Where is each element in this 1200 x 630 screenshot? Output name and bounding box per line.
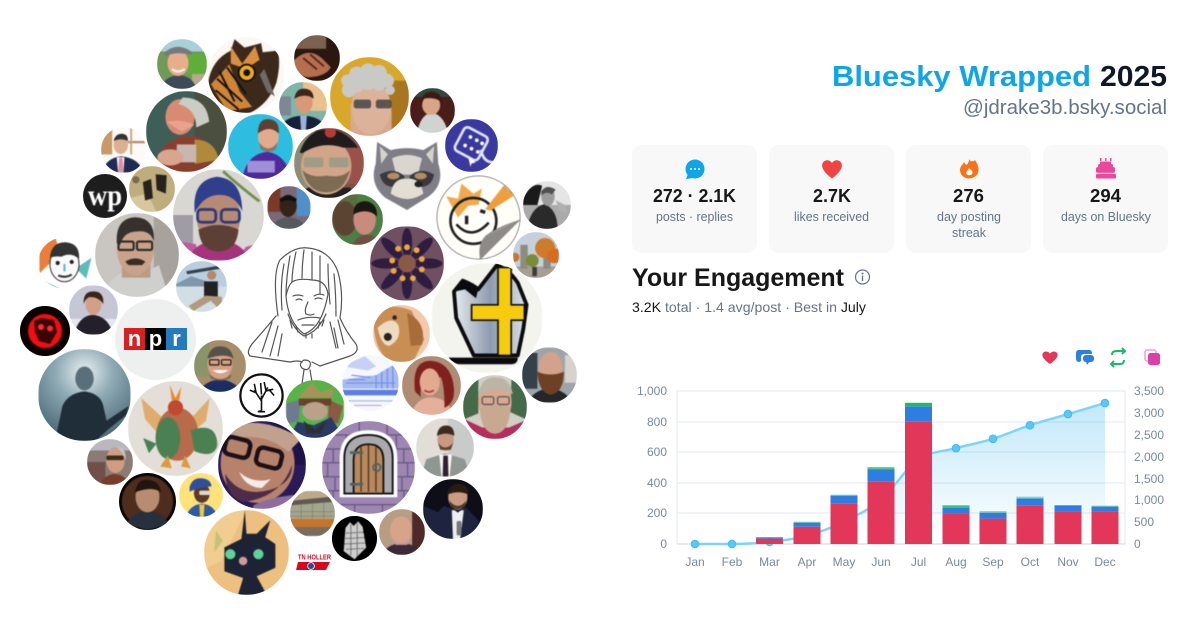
left axis labels: 0: [660, 537, 667, 551]
stat card: posts and replies: posts · replies: [656, 209, 733, 224]
left axis labels: 1,000: [637, 384, 667, 398]
avatar: NPR logo: [115, 299, 196, 380]
cumulative area: [695, 403, 1105, 544]
month labels: Mar: [759, 555, 780, 569]
avatar: bearded man with glasses and plaid: [463, 375, 527, 439]
avatar: woman with red hair: [402, 356, 461, 415]
avatar: cartoon face with orange and teal: [38, 238, 92, 288]
avatar: man in tuxedo with microphone: [423, 479, 483, 539]
stat card: days on Bluesky: days on Bluesky: [1061, 209, 1151, 224]
month labels: Jun: [871, 555, 891, 569]
logo: TN Holler: [296, 552, 331, 570]
stat card: day posting streak: streak: [952, 225, 986, 240]
legend icon: likes: [1042, 351, 1058, 364]
avatar: autumn campus: [513, 232, 559, 278]
month labels: Dec: [1094, 555, 1116, 569]
left axis labels: 800: [647, 415, 667, 429]
icon: birthday cake: [1096, 158, 1116, 178]
avatar: man in dark silhouette: [38, 349, 131, 441]
title: Bluesky Wrapped: [832, 61, 1091, 93]
avatar: man in suit with pink tie: [101, 128, 146, 173]
right axis labels: 1,500: [1134, 472, 1164, 486]
avatar: white tower on black: [332, 516, 377, 561]
avatar: man in cap with green landscape: [157, 39, 207, 89]
avatar: man with dark ring: [119, 473, 176, 530]
title: 2025: [1100, 61, 1167, 93]
center sketch of hooded man: [248, 247, 358, 384]
avatar: man with sunglasses: [87, 439, 133, 485]
right axis labels: 2,000: [1134, 450, 1164, 464]
avatar: painted figure in green: [146, 91, 227, 172]
avatar: owl painting: [208, 37, 284, 113]
month labels: May: [833, 555, 855, 569]
avatar: man in suit with capitol at sunset: [279, 82, 327, 130]
month labels: Nov: [1057, 555, 1079, 569]
avatar: NPR logo: p: [149, 326, 162, 351]
avatar: blue ink sketch: [342, 356, 399, 410]
avatar: purple brick wall with wooden door: [322, 421, 415, 514]
avatar: red circle badge: [20, 306, 70, 356]
avatar: dark letters over old map: [129, 166, 175, 212]
legend icon: replies: [1076, 350, 1094, 365]
legend icons: [1042, 348, 1160, 367]
avatar: tree icon in ring: [239, 373, 284, 418]
month labels: Aug: [945, 555, 967, 569]
avatar: man with glasses and moustache: [95, 213, 179, 297]
section heading: Your Engagement: Your Engagement: [632, 264, 845, 292]
avatar: NPR logo: n: [128, 326, 141, 351]
engagement summary: 3.2K total · 1.4 avg/post · Best in July: [632, 299, 866, 315]
stacked bars: [756, 403, 1118, 544]
cumulative line: [695, 403, 1105, 544]
month labels: Sep: [982, 555, 1004, 569]
icon: flame: [960, 159, 979, 178]
stat card: likes received: [769, 145, 894, 253]
left axis labels: 200: [647, 506, 667, 520]
avatar: child in old photo: [410, 88, 455, 133]
month labels: Oct: [1021, 555, 1040, 569]
left axis labels: 400: [647, 476, 667, 490]
avatar: Washington Post logo: [83, 174, 127, 218]
avatar: bald man smiling: [379, 509, 425, 555]
avatar: Washington Post logo: wp: [88, 179, 122, 212]
icon: heart: [822, 160, 842, 178]
right axis labels: 1,000: [1134, 493, 1164, 507]
stat card: likes received: 2.7K: [813, 186, 851, 206]
month labels: Apr: [798, 555, 816, 569]
avatar: man with monkey: [332, 194, 383, 245]
avatar: man with cap and beard: [294, 128, 364, 198]
avatar: newspaper building: [290, 490, 335, 537]
month labels: [685, 555, 1116, 569]
avatar: cartoon man in blue hat on yellow: [179, 473, 223, 517]
avatar: rooster dragon illustration: [128, 381, 223, 476]
left axis labels: [637, 384, 667, 551]
avatar: man in dark shirt: [69, 285, 118, 335]
avatar: purple logo with dice: [445, 119, 498, 172]
stat card: posts and replies: [632, 145, 757, 253]
avatar: NPR logo: r: [172, 326, 181, 351]
right axis labels: 500: [1134, 515, 1154, 529]
avatar: raccoon head: [373, 142, 441, 210]
right axis labels: [1134, 384, 1164, 551]
right axis labels: 0: [1134, 537, 1141, 551]
avatar cluster: [20, 35, 577, 595]
stat card: day posting streak: 276: [953, 186, 984, 206]
month labels: Jan: [685, 555, 705, 569]
avatar: man in grey suit: [416, 418, 474, 477]
stat card: posts and replies: 272 · 2.1K: [653, 186, 736, 206]
avatar: black cat on peach wall: [204, 510, 289, 595]
avatar: smiley sticker with pencil: [436, 175, 521, 260]
avatar: samurai figure: [285, 380, 345, 438]
avatar: bald man with red beard: [522, 347, 577, 403]
avatar: hands on a desk: [294, 35, 340, 81]
month labels: Jul: [911, 555, 926, 569]
right axis labels: 3,500: [1134, 384, 1164, 398]
avatar: man with blue hair and glasses: [173, 169, 264, 261]
engagement chart: [637, 384, 1164, 569]
right axis labels: 3,000: [1134, 406, 1164, 420]
avatar: dark-skinned man urban background: [267, 186, 311, 229]
avatar: man on a boat: [176, 261, 227, 312]
avatar: flower with face: [370, 226, 444, 301]
stat card: days on Bluesky: [1043, 145, 1168, 253]
avatar: smiling man in blue with glasses: [194, 340, 246, 392]
stat card: likes received: likes received: [794, 209, 869, 224]
month labels: Feb: [722, 555, 743, 569]
avatar: smiling man on cyan: [228, 114, 293, 179]
stat card: days on Bluesky: 294: [1090, 186, 1121, 206]
left axis labels: 600: [647, 445, 667, 459]
stat card: day posting streak: [906, 145, 1031, 253]
legend icon: quotes: [1145, 350, 1160, 365]
right panel: summary, stats and engagement chart: [620, 0, 1200, 630]
icon: chat bubble: [686, 160, 704, 179]
avatar: black and white man: [523, 181, 571, 229]
line dots: [691, 399, 1109, 548]
avatar: gold-crossed helmet: [431, 263, 543, 373]
icon: info: [856, 270, 870, 284]
right axis labels: 2,500: [1134, 428, 1164, 442]
legend icon: reposts: [1111, 348, 1125, 367]
avatar: close-up smiling man with glasses: [218, 421, 306, 509]
avatar: golden dog: [373, 305, 430, 362]
avatar: gray curly hair man on gold: [330, 57, 409, 136]
handle: @jdrake3b.bsky.social: [963, 97, 1167, 119]
stat card: day posting streak: day posting: [937, 209, 1001, 224]
